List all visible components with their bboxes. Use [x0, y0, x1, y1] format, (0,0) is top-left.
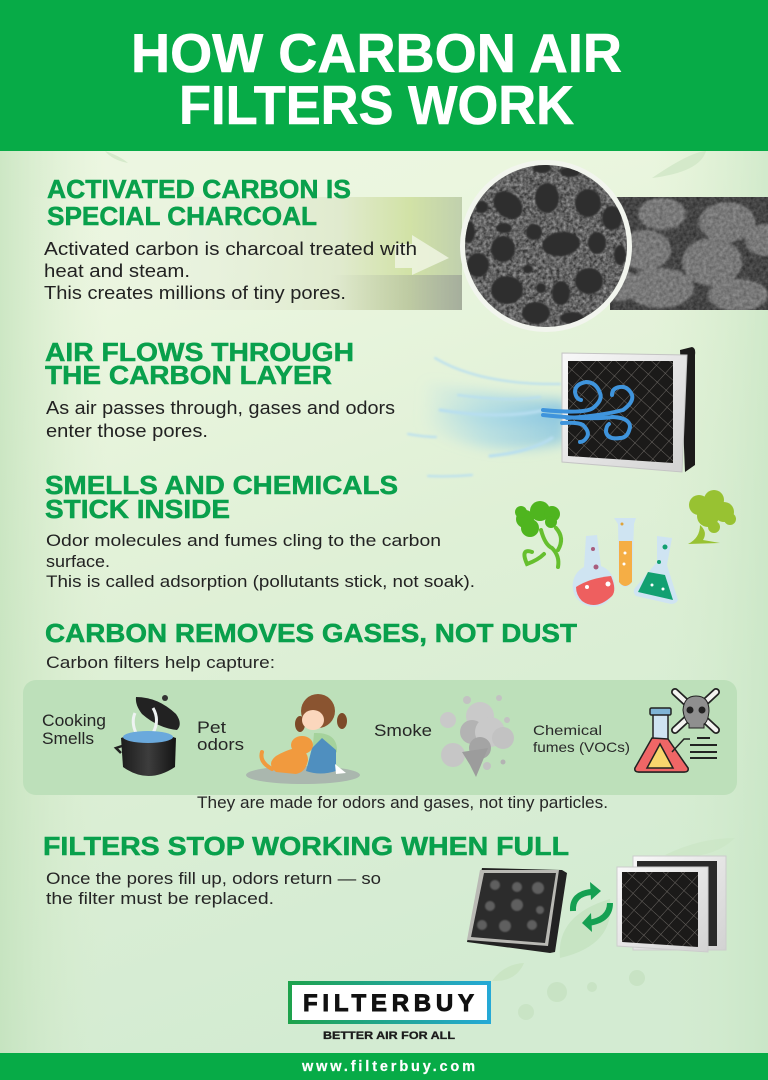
body text: Odor molecules and fumes cling to the carbon — [46, 531, 441, 550]
heading: SMELLS AND CHEMICALS — [45, 470, 398, 500]
body text: Once the pores fill up, odors return — so — [46, 870, 381, 888]
body text: Activated carbon is charcoal treated with — [44, 239, 417, 259]
title: HOW CARBON AIR — [131, 22, 622, 84]
image: new replacement filters — [617, 856, 726, 952]
header bar — [0, 0, 768, 151]
title — [131, 22, 622, 136]
icon: green odor cloud — [515, 501, 561, 567]
icon: science flasks — [573, 518, 678, 607]
label: cooking smells — [42, 712, 106, 748]
panel: what carbon filters capture — [23, 680, 737, 795]
logo: Filterbuy — [290, 983, 489, 1042]
filter — [562, 347, 695, 472]
image: charcoal band with magnified pore circle — [268, 160, 768, 332]
body text: surface. — [46, 552, 110, 571]
icon: girl with cat — [246, 694, 360, 784]
label: chemical fumes — [533, 722, 630, 755]
body text: the filter must be replaced. — [46, 890, 274, 908]
label: smoke: Smoke — [374, 722, 432, 740]
icon: warning flask — [635, 708, 717, 772]
body text — [46, 870, 381, 908]
body text: This creates millions of tiny pores. — [44, 283, 346, 303]
body text: This is called adsorption (pollutants stick, not soak). — [46, 572, 475, 591]
label: chemical fumes: Chemical — [533, 722, 602, 738]
icon: steaming pot — [116, 695, 180, 776]
section 2: air flow — [45, 337, 695, 476]
heading — [45, 470, 398, 524]
website: www.filterbuy.com — [301, 1059, 475, 1075]
body text: heat and steam. — [44, 261, 190, 281]
heading — [45, 337, 354, 390]
icon: skull and crossbones — [675, 692, 716, 730]
heading: FILTERS STOP WORKING WHEN FULL — [43, 831, 569, 861]
heading: SPECIAL CHARCOAL — [47, 201, 317, 231]
section 1: activated carbon — [25, 160, 768, 332]
image: used dirty filter — [467, 868, 567, 953]
icon: wind stream into carbon filter — [408, 347, 695, 476]
logo: Filterbuy: BETTER AIR FOR ALL — [323, 1030, 455, 1042]
heading: CARBON REMOVES GASES, NOT DUST — [45, 618, 577, 648]
label: cooking smells: Smells — [42, 730, 94, 748]
heading — [47, 174, 351, 231]
body text — [44, 239, 417, 303]
body text — [46, 398, 395, 441]
label: pet odors: Pet — [197, 719, 226, 737]
title: FILTERS WORK — [179, 74, 574, 136]
label: pet odors: odors — [197, 736, 244, 754]
body text: As air passes through, gases and odors — [46, 398, 395, 418]
label: cooking smells: Cooking — [42, 712, 106, 730]
footer bar — [0, 1053, 768, 1080]
label: chemical fumes: fumes (VOCs) — [533, 739, 630, 755]
section 5: replace filters — [43, 831, 726, 953]
body text — [46, 531, 475, 591]
heading: THE CARBON LAYER — [45, 360, 332, 390]
intro text: Carbon filters help capture: — [46, 654, 275, 672]
caption: They are made for odors and gases, not tiny particles. — [197, 794, 608, 812]
icon: replace arrows — [573, 882, 610, 932]
heading: ACTIVATED CARBON IS — [47, 174, 351, 204]
heading: AIR FLOWS THROUGH — [45, 337, 354, 367]
icon: wind curls — [543, 382, 632, 442]
icon: smoke cloud — [440, 695, 514, 777]
icon: yellow-green smoke — [688, 490, 736, 544]
label: pet odors — [197, 719, 244, 754]
logo: Filterbuy: FILTERBUY — [303, 990, 474, 1017]
section 4: gases not dust — [23, 618, 737, 812]
section 3: smells and chemicals — [45, 470, 736, 607]
heading: STICK INSIDE — [45, 494, 230, 524]
body text: enter those pores. — [46, 421, 208, 441]
